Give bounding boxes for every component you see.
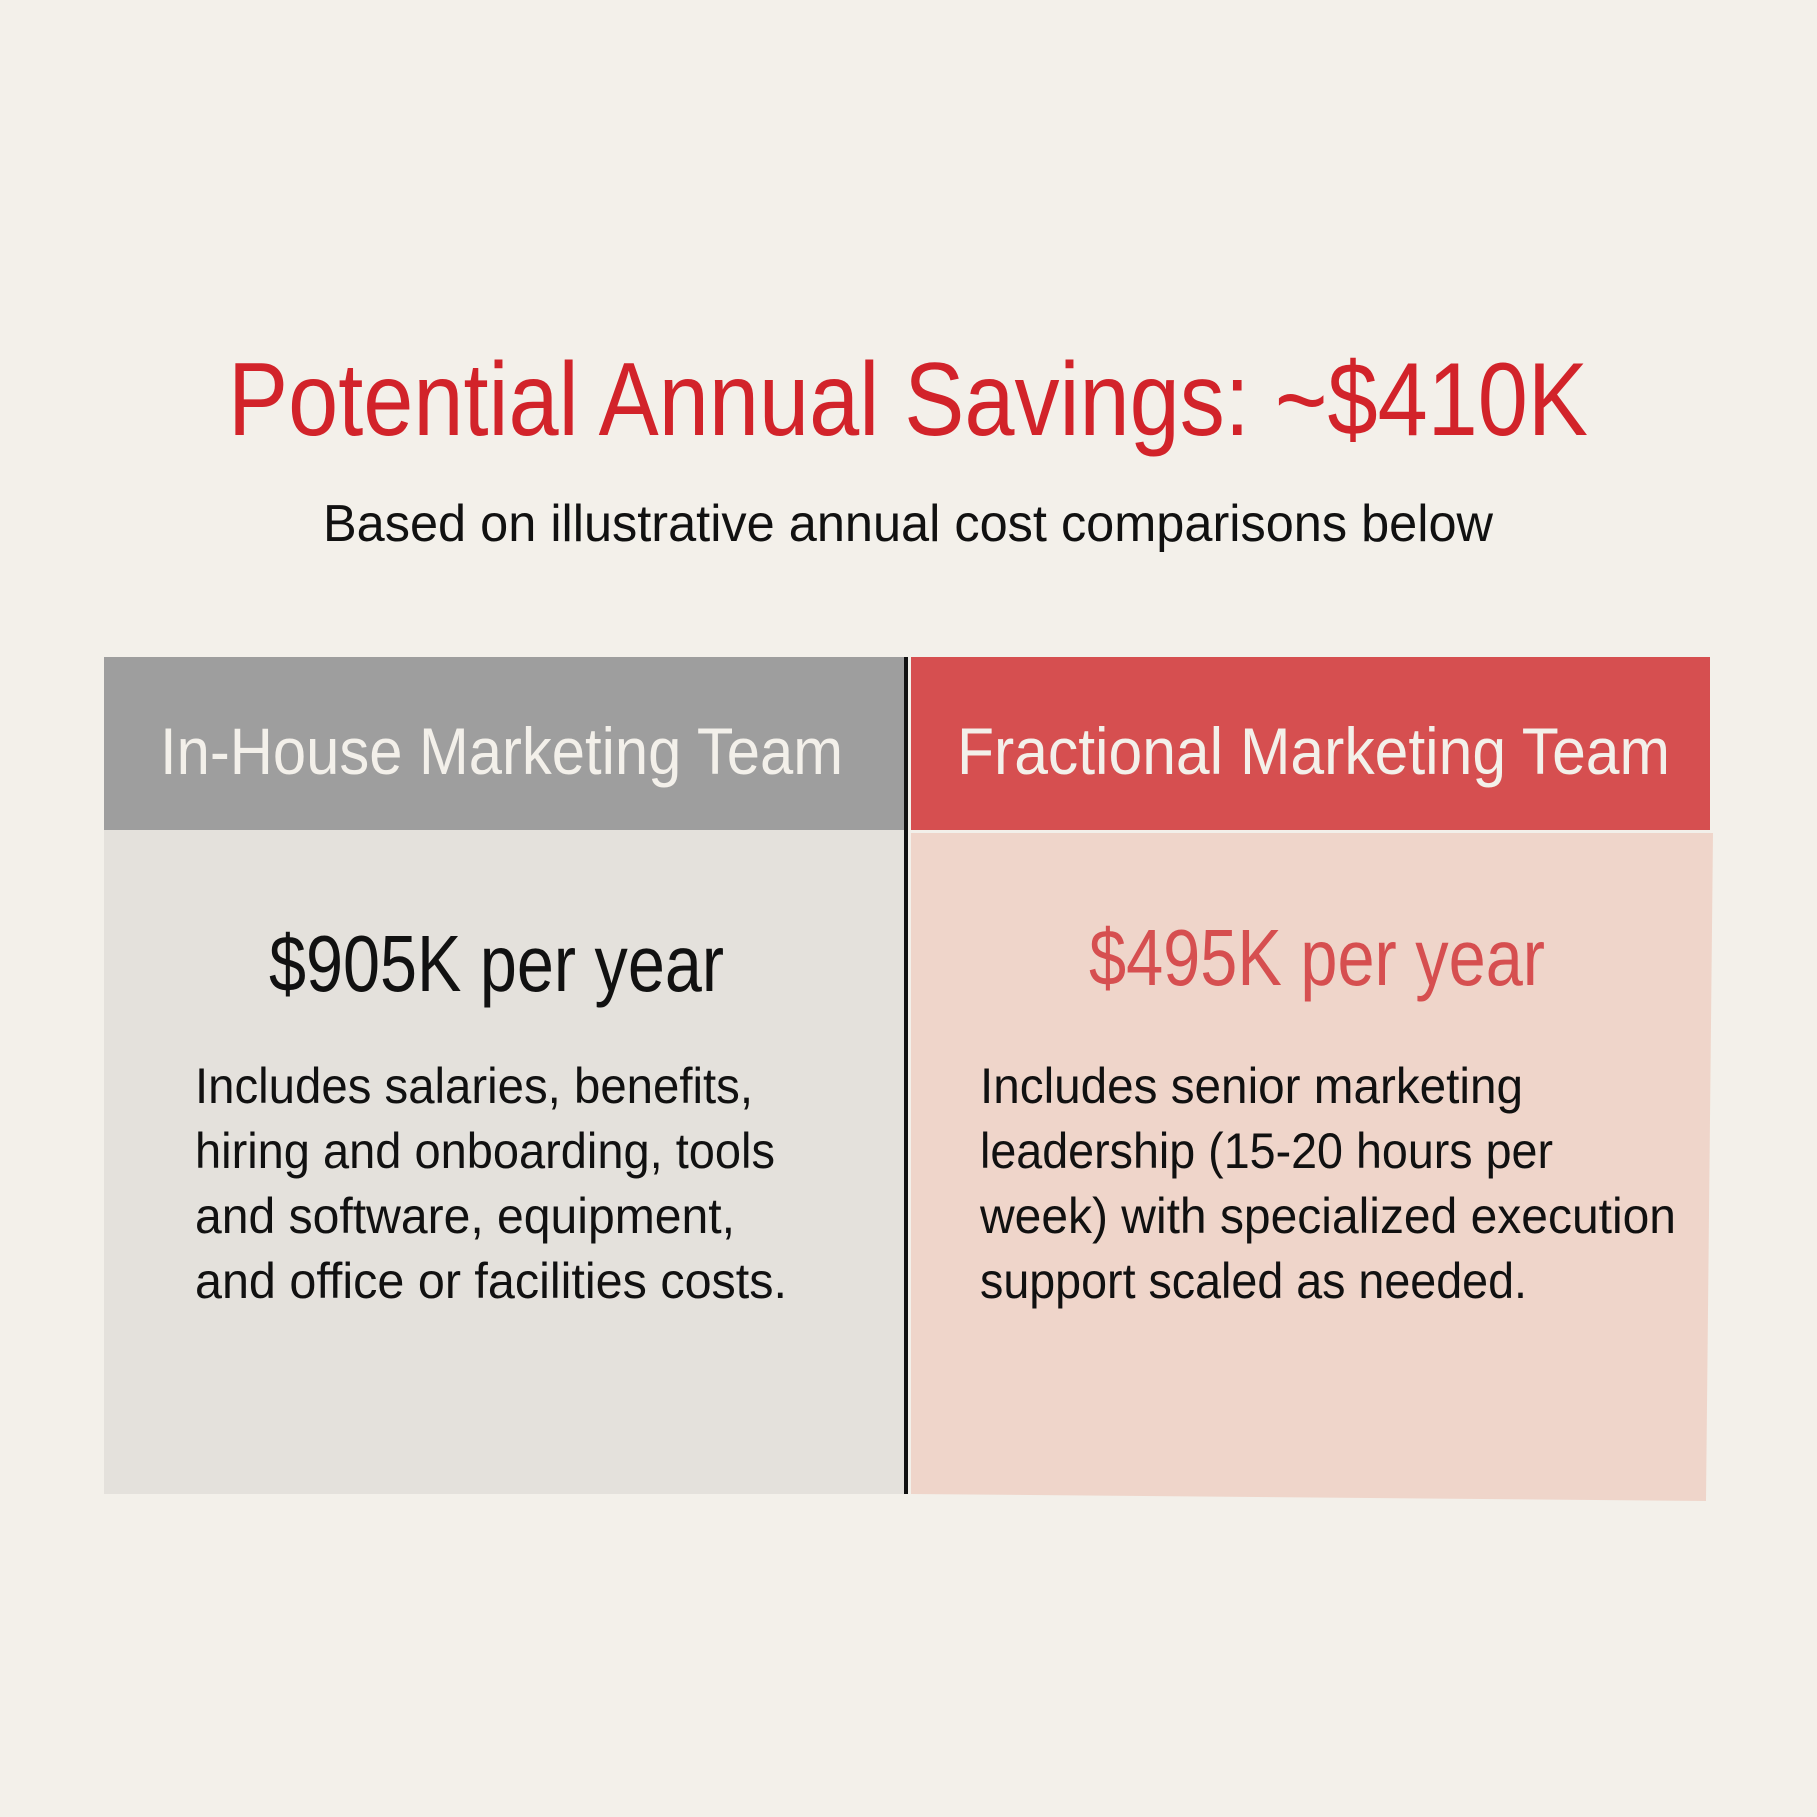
- header: in-house: [104, 657, 905, 830]
- description: in-house: and office or facilities costs.: [195, 1253, 787, 1309]
- header: fractional: Fractional Marketing Team: [957, 714, 1670, 788]
- title: Potential Annual Savings: ~$410K: [228, 342, 1588, 458]
- description: fractional: [979, 1058, 1676, 1309]
- header: in-house: In-House Marketing Team: [160, 714, 843, 788]
- divider line: [904, 657, 908, 1494]
- panel: in-house: [104, 657, 905, 1494]
- price: in-house: $905K per year: [269, 919, 724, 1008]
- description: in-house: Includes salaries, benefits,: [195, 1058, 753, 1114]
- description: fractional: leadership (15-20 hours per: [980, 1123, 1553, 1179]
- description: fractional: support scaled as needed.: [980, 1253, 1527, 1309]
- header: fractional: [911, 657, 1710, 830]
- description: in-house: and software, equipment,: [195, 1188, 735, 1244]
- description: in-house: hiring and onboarding, tools: [195, 1123, 775, 1179]
- description: in-house: [195, 1058, 787, 1309]
- description: fractional: Includes senior marketing: [980, 1058, 1523, 1114]
- panel: fractional: [911, 657, 1713, 1501]
- description: fractional: week) with specialized execution: [979, 1188, 1676, 1244]
- price: fractional: $495K per year: [1089, 913, 1545, 1002]
- subtitle: Based on illustrative annual cost comparisons below: [323, 495, 1493, 553]
